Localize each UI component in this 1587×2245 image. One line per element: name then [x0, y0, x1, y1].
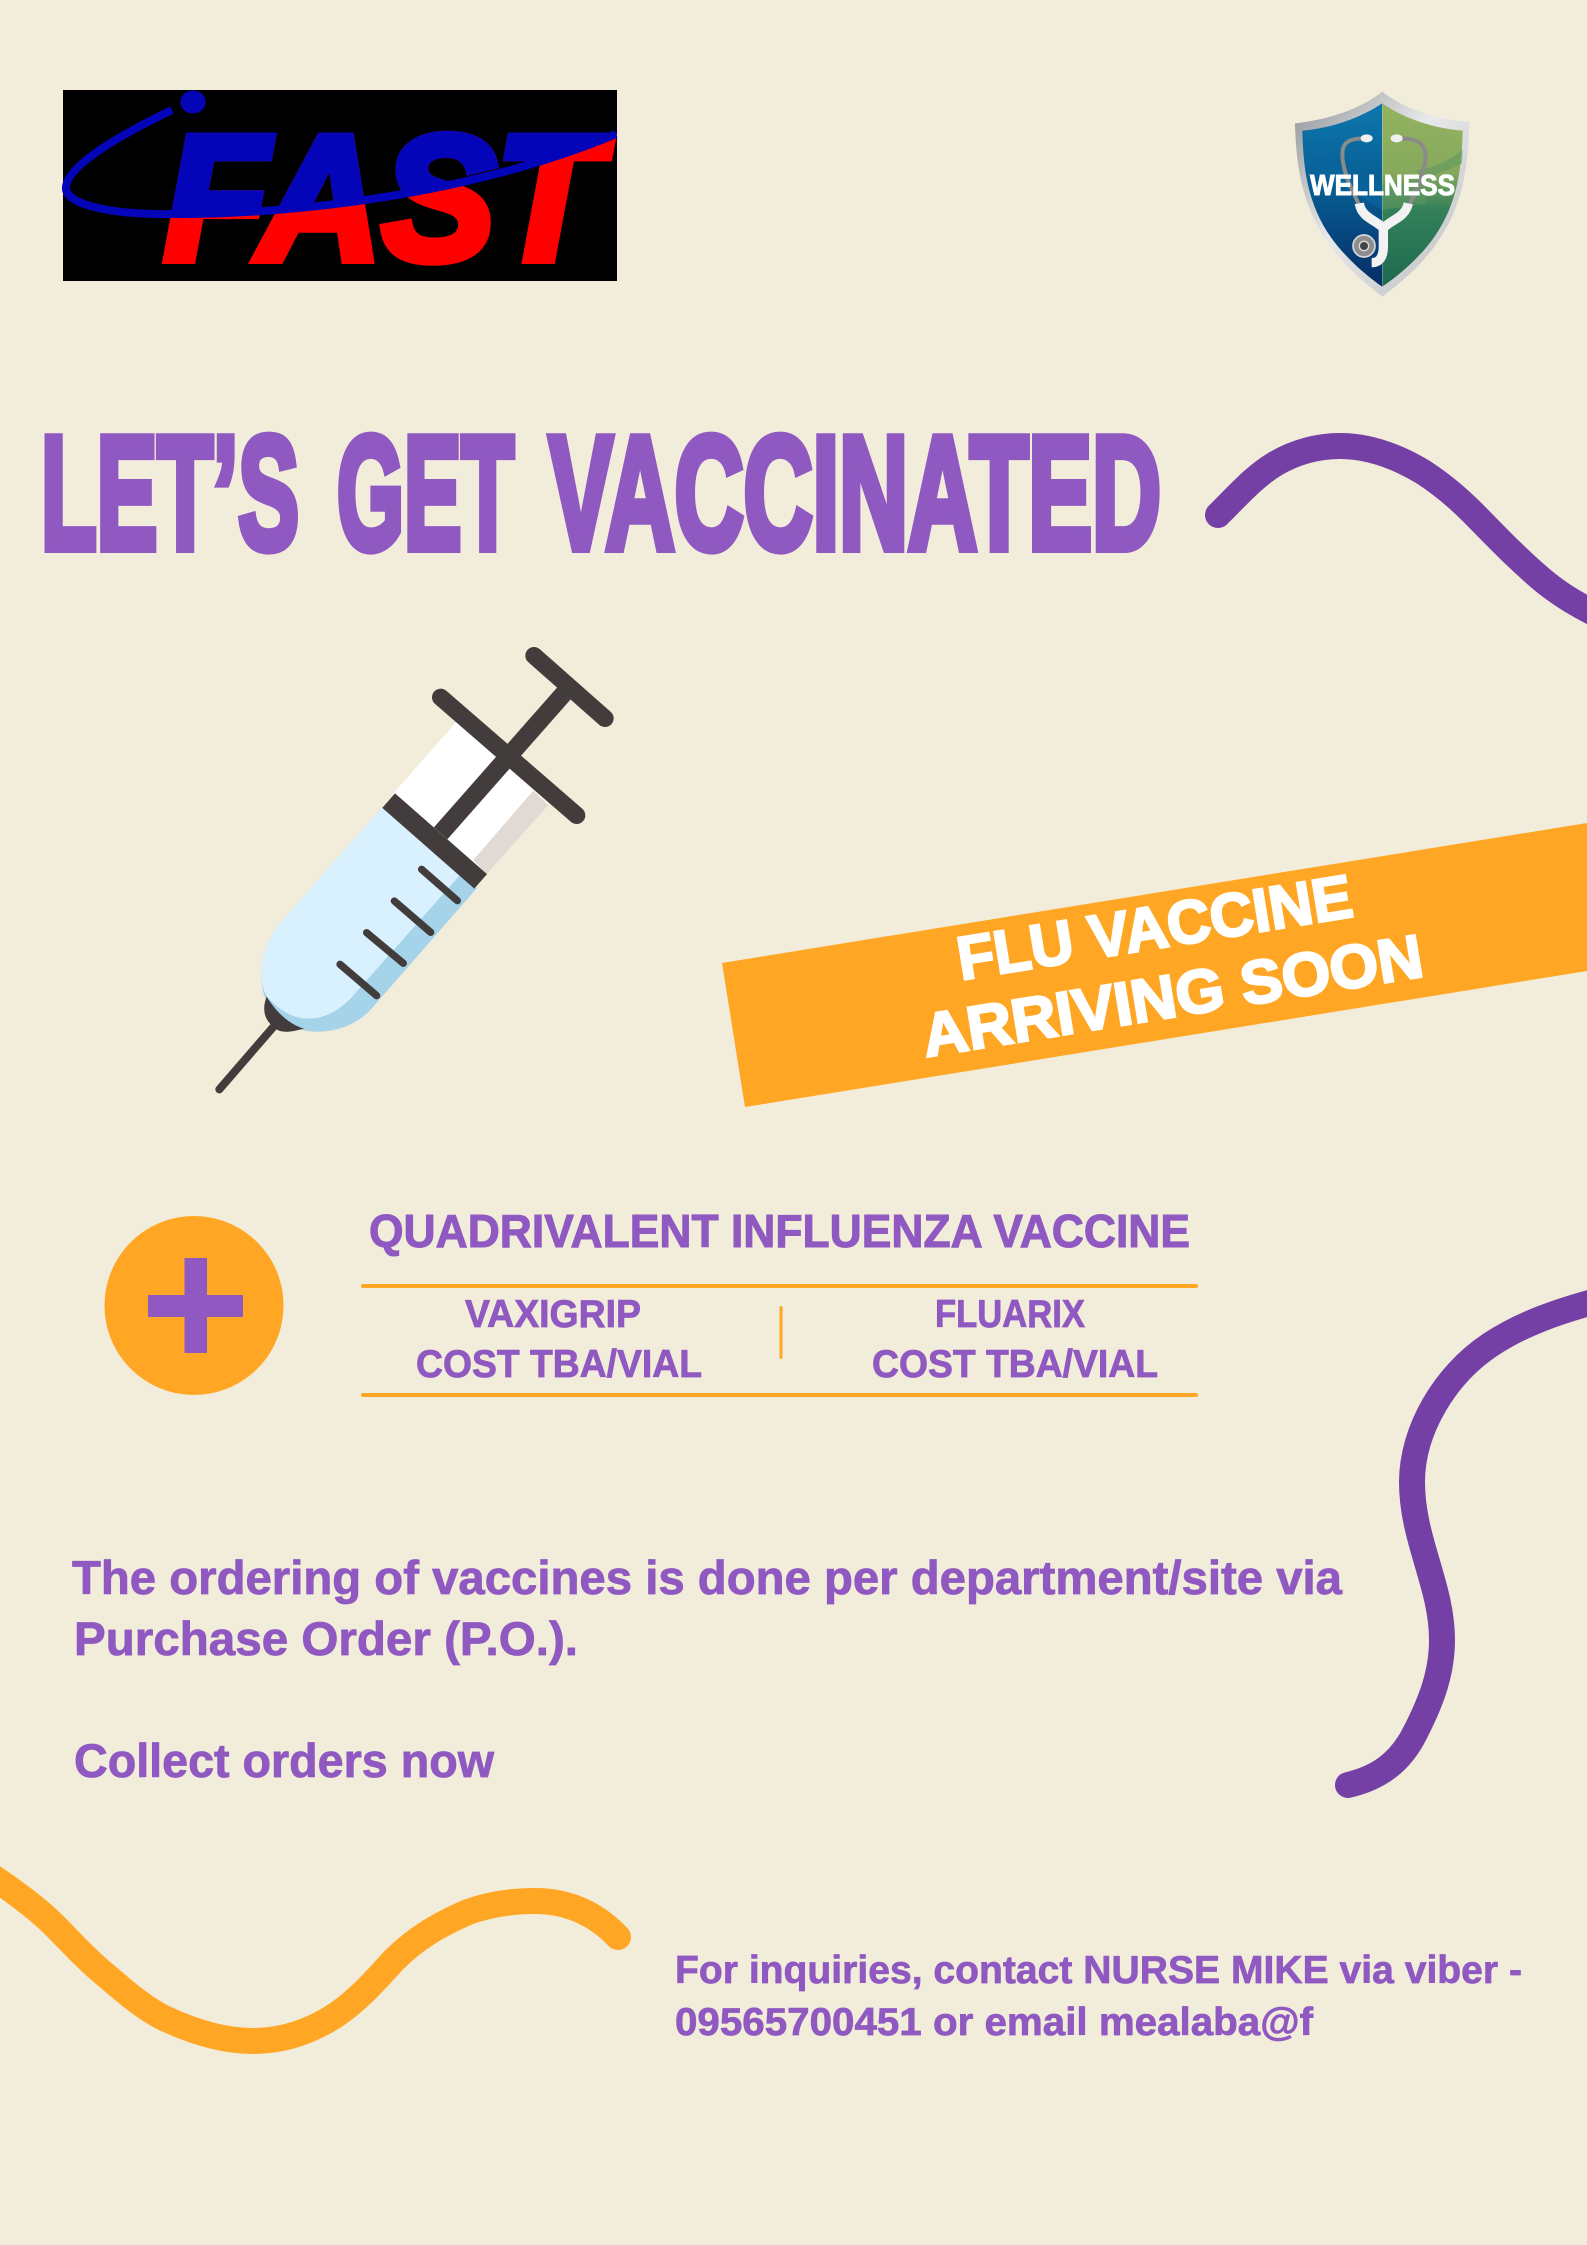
logo: wellness shield	[1295, 92, 1469, 297]
logo: FAST: FAST	[164, 98, 613, 298]
banner: flu vaccine arriving soon: FLU VACCINE	[952, 862, 1357, 993]
title: GET	[337, 404, 514, 584]
table: quadrivalent influenza vaccine: FLUARIX	[935, 1293, 1085, 1336]
swoosh: top right	[1218, 446, 1587, 616]
title	[41, 404, 1161, 584]
table: quadrivalent influenza vaccine: QUADRIVALENT INFLUENZA VACCINE	[369, 1205, 1190, 1257]
icon: syringe	[219, 656, 605, 1089]
table: quadrivalent influenza vaccine: COST TBA/VIAL	[872, 1343, 1158, 1386]
logo: FAST: FAST	[164, 98, 613, 298]
text block: contact: For inquiries, contact NURSE MIKE via viber -	[675, 1949, 1522, 1992]
title: VACCINATED	[549, 404, 1161, 584]
table: quadrivalent influenza vaccine: COST TBA/VIAL	[416, 1343, 702, 1386]
logo: wellness shield: WELLNESS	[1310, 170, 1455, 202]
swoosh: right	[1348, 1300, 1587, 1785]
swoosh: bottom left	[0, 1872, 618, 2041]
text block: ordering instructions: The ordering of vaccines is done per department/site via	[72, 1551, 1343, 1604]
text block: contact	[675, 1949, 1522, 2044]
title: LET’S	[41, 404, 299, 584]
banner: flu vaccine arriving soon	[722, 823, 1587, 1107]
icon: plus circle	[104, 1216, 284, 1395]
banner: flu vaccine arriving soon: ARRIVING SOON	[917, 922, 1428, 1070]
table: quadrivalent influenza vaccine	[361, 1205, 1198, 1397]
text block: ordering instructions	[72, 1551, 1343, 1787]
table: quadrivalent influenza vaccine: VAXIGRIP	[465, 1293, 641, 1336]
text block: contact: 09565700451 or email mealaba@f	[675, 2001, 1314, 2044]
text block: ordering instructions: Purchase Order (P.O.).	[74, 1612, 578, 1665]
text block: ordering instructions: Collect orders now	[74, 1734, 494, 1787]
